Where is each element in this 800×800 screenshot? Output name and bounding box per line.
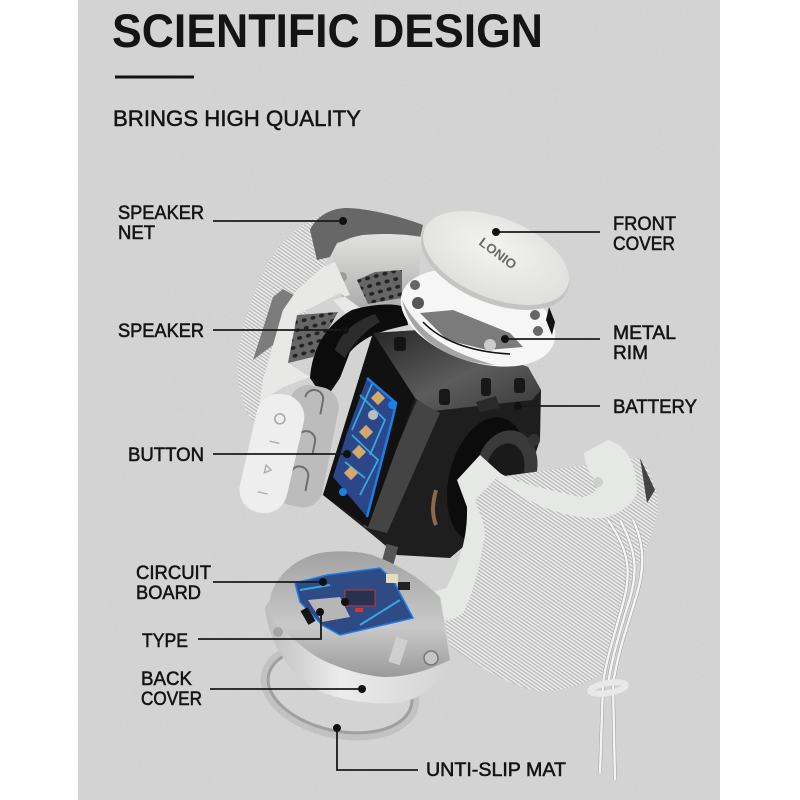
speaker inner highlight [335,314,380,358]
label: front cover: FRONT [613,214,676,235]
label: circuit board: CIRCUIT [136,563,211,584]
label: speaker net [118,203,347,244]
label: circuit board [136,563,327,604]
title: SCIENTIFIC DESIGN [112,4,543,57]
button front plate [235,389,309,518]
speaker net left shell [238,208,423,423]
front cover [407,192,583,329]
label: metal rim: METAL [613,323,676,344]
label: battery: BATTERY [613,397,697,418]
label: unti-slip mat [333,724,566,781]
label: circuit board: BOARD [136,583,201,604]
back cover shell [265,551,453,703]
label: speaker: SPEAKER [118,321,204,342]
label: battery [514,397,697,418]
speaker body [323,330,545,572]
label: type [142,608,324,652]
button back plate [270,382,342,511]
speaker driver [310,304,408,400]
label: back cover: COVER [141,689,202,710]
label: speaker net: SPEAKER [118,203,204,224]
label: button [128,445,351,466]
metal rim [388,251,568,385]
label: button: BUTTON [128,445,204,466]
front cover: LONIO [476,234,520,272]
button circuit board [333,378,396,517]
label: back cover [141,669,366,710]
subtitle: BRINGS HIGH QUALITY [113,106,361,131]
title underline [115,76,194,78]
main circuit board [295,568,413,635]
nylon cord [589,520,642,780]
label: metal rim [501,323,676,364]
label: speaker [118,321,349,342]
label: metal rim: RIM [613,343,648,364]
label: front cover: COVER [613,234,675,255]
label: unti-slip mat: UNTI-SLIP MAT [426,760,566,781]
exploded speaker illustration [235,192,658,780]
label: back cover: BACK [141,669,192,690]
right mesh shell [407,440,658,691]
label: speaker net: NET [118,223,155,244]
unti-slip mat ring [257,631,423,749]
label: front cover [492,214,676,255]
label: type: TYPE [142,631,188,652]
